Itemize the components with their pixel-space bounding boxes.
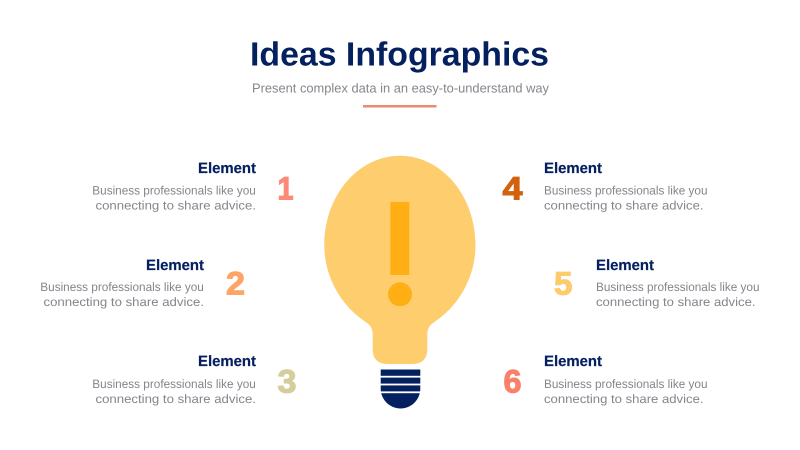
text 3 — [92, 377, 256, 406]
exclamation bar — [390, 202, 409, 275]
heading 6: Element — [544, 353, 602, 370]
text 5: Business professionals like you — [596, 280, 760, 294]
title underline — [363, 105, 436, 108]
text 3: Business professionals like you — [92, 377, 256, 391]
item 4 — [502, 160, 708, 212]
text 6: Business professionals like you — [544, 377, 708, 391]
heading 4: Element — [544, 160, 602, 177]
text 6: connecting to share advice. — [544, 392, 704, 406]
item 3 — [92, 353, 296, 406]
exclamation dot — [388, 282, 412, 306]
heading 3: Element — [198, 353, 256, 370]
icon: light bulb — [324, 156, 476, 408]
heading 1: Element — [198, 160, 256, 177]
text 6 — [544, 377, 708, 406]
bulb glass — [324, 156, 476, 364]
text 2: connecting to share advice. — [44, 295, 204, 309]
text 2: Business professionals like you — [40, 280, 204, 294]
title: Ideas Infographics — [250, 36, 549, 74]
text 4: Business professionals like you — [544, 184, 708, 198]
text 5 — [596, 280, 760, 309]
text 1 — [92, 184, 256, 212]
text 4 — [544, 184, 708, 212]
text 2 — [40, 280, 204, 309]
item 2 — [40, 257, 245, 309]
text 1: connecting to share advice. — [96, 198, 256, 212]
text 5: connecting to share advice. — [596, 295, 756, 309]
heading 2: Element — [146, 257, 204, 274]
item 1 — [92, 160, 294, 212]
subtitle: Present complex data in an easy-to-understand way — [252, 80, 549, 96]
number 2: 2 — [226, 266, 245, 302]
item 6 — [504, 353, 708, 406]
text 4: connecting to share advice. — [544, 198, 704, 212]
item 5 — [554, 257, 760, 309]
text 1: Business professionals like you — [92, 184, 256, 198]
number 3: 3 — [278, 364, 296, 400]
number 6: 6 — [504, 364, 522, 400]
bulb screw base — [380, 370, 421, 408]
heading 5: Element — [596, 257, 654, 274]
number 5: 5 — [554, 266, 572, 302]
text 3: connecting to share advice. — [96, 392, 256, 406]
number 4: 4 — [502, 170, 522, 206]
number 1: 1 — [278, 170, 294, 206]
